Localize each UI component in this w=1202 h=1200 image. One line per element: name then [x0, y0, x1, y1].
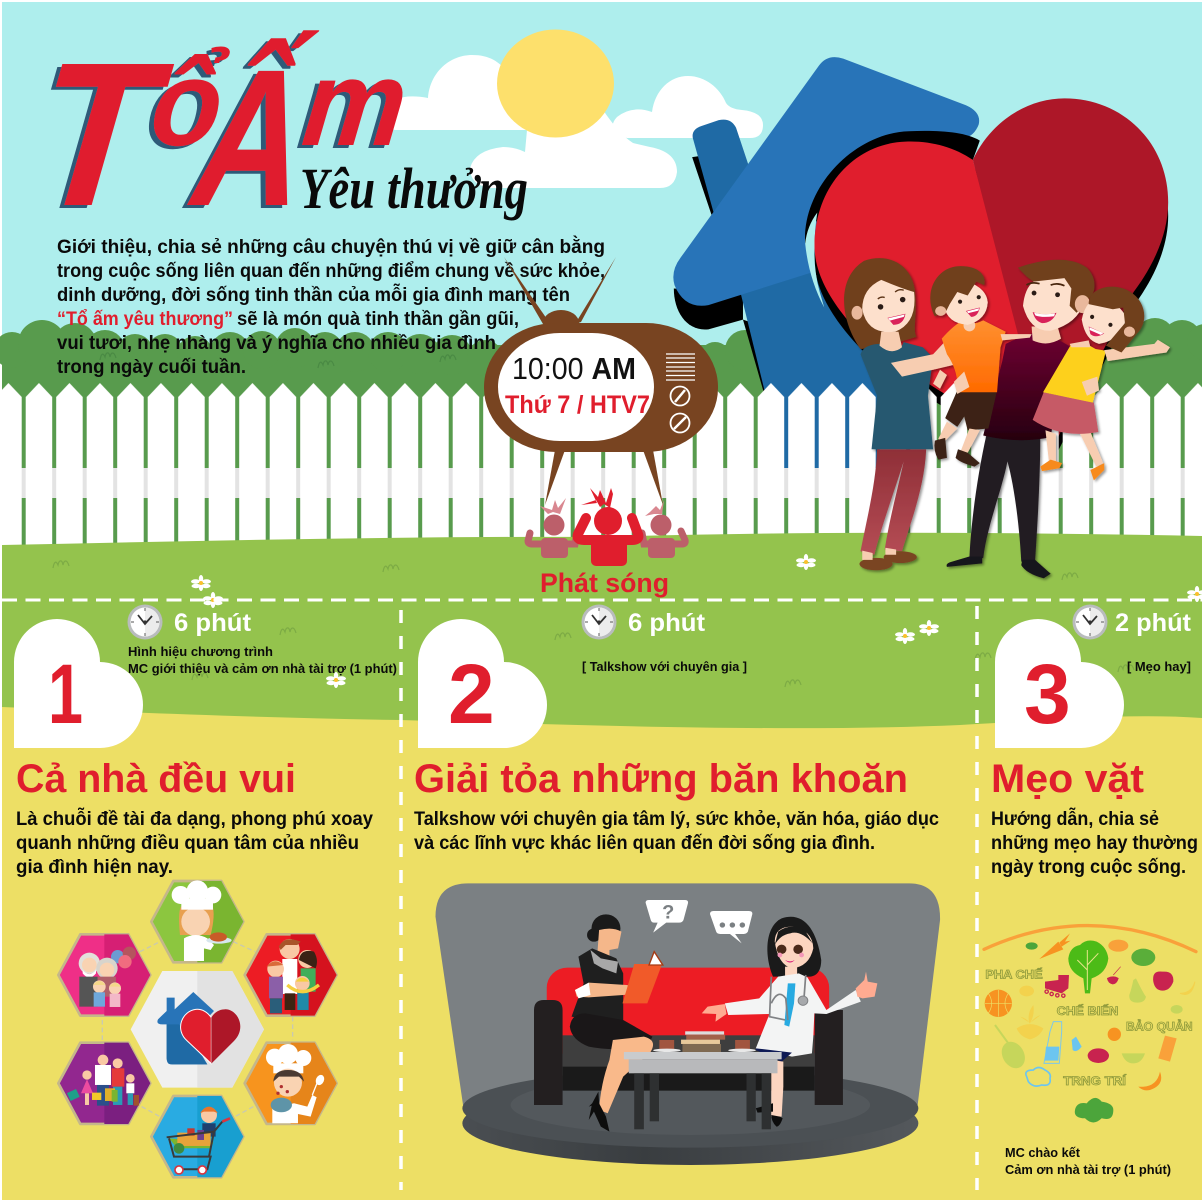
closing note: [1005, 1145, 1171, 1177]
icon: house and heart logo: [673, 57, 1168, 472]
label: Pha chế: PHA CHẾ: [985, 966, 1043, 981]
description: ngày trong cuộc sống.: [991, 856, 1186, 878]
chimney: [692, 120, 750, 216]
connectors: [102, 942, 293, 1117]
intro text block: dinh dưỡng, đời sống tinh thần của mỗi gia đình mang tên: [57, 284, 570, 306]
heading: Cả nhà đều vui: [16, 757, 296, 801]
coffee table: [624, 1052, 782, 1129]
yellow ground: [2, 707, 1202, 1200]
hexagon: family red: [245, 934, 337, 1016]
icon: TV: [484, 257, 718, 505]
flowers: [191, 554, 1202, 688]
sofa: [534, 968, 843, 1105]
heart right half: [973, 98, 1168, 458]
panel: segment 2: [414, 604, 939, 854]
heart top crescent: [805, 131, 980, 244]
speech bubble: dots: [710, 911, 752, 943]
closing note: Cảm ơn nhà tài trợ (1 phút): [1005, 1162, 1171, 1177]
segment note: [ Mẹo hay]: [1127, 659, 1191, 674]
woman host: [570, 914, 663, 1132]
duration 6 phút: [128, 604, 252, 640]
stage: [462, 1069, 918, 1165]
doodle: cloud outline: [1026, 1067, 1050, 1086]
heart number 1: [14, 619, 143, 748]
arc: [984, 926, 1196, 952]
bushes: [0, 318, 1202, 545]
speech bubble: question: ?: [662, 902, 674, 923]
description: [991, 806, 1198, 878]
hexagon: chef boy: [245, 1043, 337, 1124]
doodle: apples: [1107, 949, 1173, 991]
panel: segment 1: [14, 604, 397, 878]
hexagon: chef girl: [151, 880, 243, 962]
grass tufts: [53, 353, 1134, 687]
illustration: talk show studio: [435, 883, 940, 1165]
doodle: carrot: [1039, 933, 1071, 959]
illustration: family: [844, 258, 1170, 578]
doodle: orange: [1108, 1028, 1121, 1041]
doodle: green splat: [1075, 1098, 1113, 1122]
heading: Mẹo vặt: [991, 757, 1144, 801]
tv time text: 10:00 AM: [512, 351, 636, 386]
doodle: small splats: [1019, 940, 1195, 1051]
grass: [2, 533, 1202, 760]
description: [16, 806, 373, 878]
label: Bảo quản: BẢO QUẢN: [1126, 1019, 1193, 1034]
heading: Giải tỏa những băn khoăn: [414, 757, 908, 801]
backdrop: [435, 883, 940, 1105]
tv speaker and knobs: [666, 354, 695, 432]
doodle: lettuce: [1068, 941, 1108, 993]
title: Tổ Ấm: [25, 20, 414, 249]
duration 2 phút: 2 phút: [1115, 609, 1192, 637]
fence rail: [2, 468, 1202, 498]
doodle: water fill: [1045, 1047, 1059, 1061]
intro text block: “Tổ ấm yêu thương”: [57, 309, 233, 330]
label: Chế biến: CHẾ BIẾN: [1057, 1003, 1118, 1018]
description: [414, 808, 939, 854]
aqua sliver: [805, 212, 824, 308]
hexagon: grandparents: [58, 934, 150, 1016]
duration 6 phút: [582, 604, 706, 640]
intro text block: trong ngày cuối tuần.: [57, 357, 246, 378]
doodle: juice glass: [1158, 1036, 1177, 1062]
panel: segment 3: [991, 604, 1198, 878]
doodle: basketball: [985, 990, 1012, 1017]
antennas: [504, 257, 616, 324]
heart number 2: 2: [448, 647, 495, 741]
segment notes: MC giới thiệu và cảm ơn nhà tài trợ (1 phút): [128, 661, 397, 676]
doodle: tomato: [1088, 1048, 1109, 1063]
hexagon illustration: [58, 880, 337, 1177]
hexagon: shopping cart: [151, 1096, 243, 1177]
duration 6 phút: 6 phút: [628, 609, 706, 637]
intro text block: sẽ là món quà tinh thần gần gũi,: [237, 309, 519, 330]
doodle: racket: [995, 1025, 1030, 1072]
speech bubble: question: [646, 900, 688, 933]
doodle: water bottle: [1044, 1022, 1062, 1063]
roof: [673, 57, 979, 306]
heart number 3: 3: [1024, 647, 1071, 741]
caption: Phát sóng: Phát sóng: [540, 568, 669, 598]
son: [930, 266, 1032, 467]
mother: [844, 258, 960, 570]
title: Tổ Ấm: ổ: [145, 34, 232, 171]
clouds: [382, 55, 763, 188]
title: Tổ Ấm: T: [25, 20, 180, 249]
doodle: roller skate: [1045, 975, 1069, 997]
intro text block: [57, 236, 605, 378]
roof shadow: [674, 289, 743, 330]
daughter: [1033, 287, 1170, 480]
segment note: [ Talkshow với chuyên gia ]: [582, 659, 747, 674]
title: Tổ Ấm: m: [297, 34, 414, 171]
closing note: MC chào kết: [1005, 1145, 1081, 1160]
description: quanh những điều quan tâm của nhiều: [16, 832, 359, 854]
doodle: banana: [1138, 1072, 1161, 1090]
books and cups: [653, 1031, 756, 1052]
intro text block: Giới thiệu, chia sẻ những câu chuyện thú vị về giữ cân bằng: [57, 236, 605, 258]
heart number 1: 1: [48, 647, 83, 741]
heart shadow: [815, 112, 1168, 472]
tv body: [484, 310, 718, 505]
subtitle: Yêu thưởng: Yêu thưởng: [300, 156, 528, 221]
title: Tổ Ấm: Ấ: [182, 29, 320, 247]
description: Talkshow với chuyên gia tâm lý, sức khỏe, văn hóa, giáo dục: [414, 808, 939, 830]
duration 2 phút: [1072, 604, 1192, 640]
segment notes: Hình hiệu chương trình: [128, 644, 273, 659]
description: Hướng dẫn, chia sẻ: [991, 806, 1159, 830]
intro text block: vui tươi, nhẹ nhàng và ý nghĩa cho nhiều gia đình: [57, 333, 496, 354]
heart number 3: [995, 619, 1124, 748]
heart left half: [815, 141, 1047, 458]
fence pickets: [2, 380, 1202, 550]
tv screen: [498, 333, 654, 441]
description: và các lĩnh vực khác liên quan đến đời sống gia đình.: [414, 832, 875, 854]
dashed dividers: [2, 600, 1202, 1190]
heart number 2: [418, 619, 547, 748]
doodle: pear: [1129, 978, 1146, 1003]
tv channel text: Thứ 7 / HTV7: [505, 391, 650, 419]
sun: [497, 30, 614, 138]
description: gia đình hiện nay.: [16, 856, 173, 878]
doodle: yellow turnip: [1017, 1005, 1043, 1039]
house body: [740, 268, 937, 472]
hexagon: shopping family: [58, 1043, 150, 1124]
illustration: tips food doodles: [984, 926, 1196, 1122]
intro text block: trong cuộc sống liên quan đến những điểm chung về sức khỏe,: [57, 261, 605, 282]
doodle: juicer: [1122, 1053, 1145, 1063]
segment notes: [128, 644, 397, 676]
center hexagon: [131, 971, 264, 1088]
duration 6 phút: 6 phút: [174, 609, 252, 637]
father: [947, 260, 1095, 578]
label: Trang trí: TRNG TRÍ: [1063, 1073, 1127, 1088]
woman doctor: [702, 917, 877, 1127]
icon: viewers with sparks: [528, 488, 685, 566]
description: Là chuỗi đề tài đa dạng, phong phú xoay: [16, 806, 373, 830]
